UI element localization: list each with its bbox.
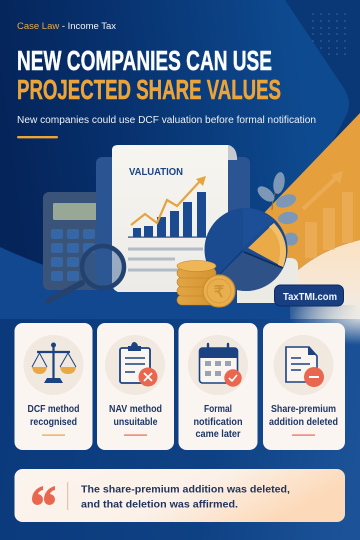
callout	[14, 469, 345, 522]
label: recognised	[30, 416, 77, 428]
label: came later	[196, 428, 240, 440]
magnifying glass	[48, 246, 124, 301]
icon: document with minus	[286, 347, 324, 387]
panel: Formal notification came later	[178, 323, 258, 450]
panel: NAV method unsuitable	[97, 323, 174, 450]
valuation label: VALUATION	[129, 167, 183, 178]
website badge	[274, 285, 344, 306]
eyebrow: Case Law - Income Tax	[17, 21, 117, 31]
bar chart	[128, 192, 208, 238]
panel: Share-premium addition deleted	[263, 323, 345, 450]
icon: clipboard with cross	[120, 342, 158, 386]
label: Formal	[204, 403, 232, 415]
label: addition deleted	[269, 416, 338, 428]
label: NAV method	[109, 403, 162, 415]
text lines	[128, 248, 203, 272]
icon: calendar with check	[200, 344, 242, 387]
rupee coin: ₹	[214, 284, 224, 301]
orange panel	[240, 113, 360, 270]
label: unsuitable	[114, 416, 158, 428]
trend arrow	[131, 176, 206, 225]
faded chart on orange	[303, 171, 353, 258]
label: Share-premium	[271, 403, 336, 415]
subtitle: New companies could use DCF valuation before formal notification	[17, 115, 316, 126]
coin stack	[177, 260, 216, 305]
quote text: The share-premium addition was deleted,	[81, 484, 290, 496]
rupee coin	[203, 275, 235, 307]
clipboard backing	[96, 157, 250, 285]
website badge: TaxTMI.com	[283, 291, 337, 303]
calculator	[43, 192, 103, 290]
label: DCF method	[28, 403, 80, 415]
label: notification	[194, 416, 242, 428]
quote text: and that deletion was affirmed.	[81, 498, 238, 510]
pedestal	[237, 258, 298, 303]
illustration	[43, 145, 299, 307]
paper	[112, 145, 237, 292]
title	[17, 45, 281, 105]
dot grid	[312, 13, 346, 55]
icon: quote marks	[32, 486, 55, 505]
pie chart	[204, 208, 288, 291]
icon: scales	[32, 342, 76, 383]
floor and cream sweep	[0, 240, 360, 345]
panel: DCF method recognised	[14, 323, 92, 450]
plant	[255, 171, 299, 246]
accent rule	[17, 136, 58, 138]
